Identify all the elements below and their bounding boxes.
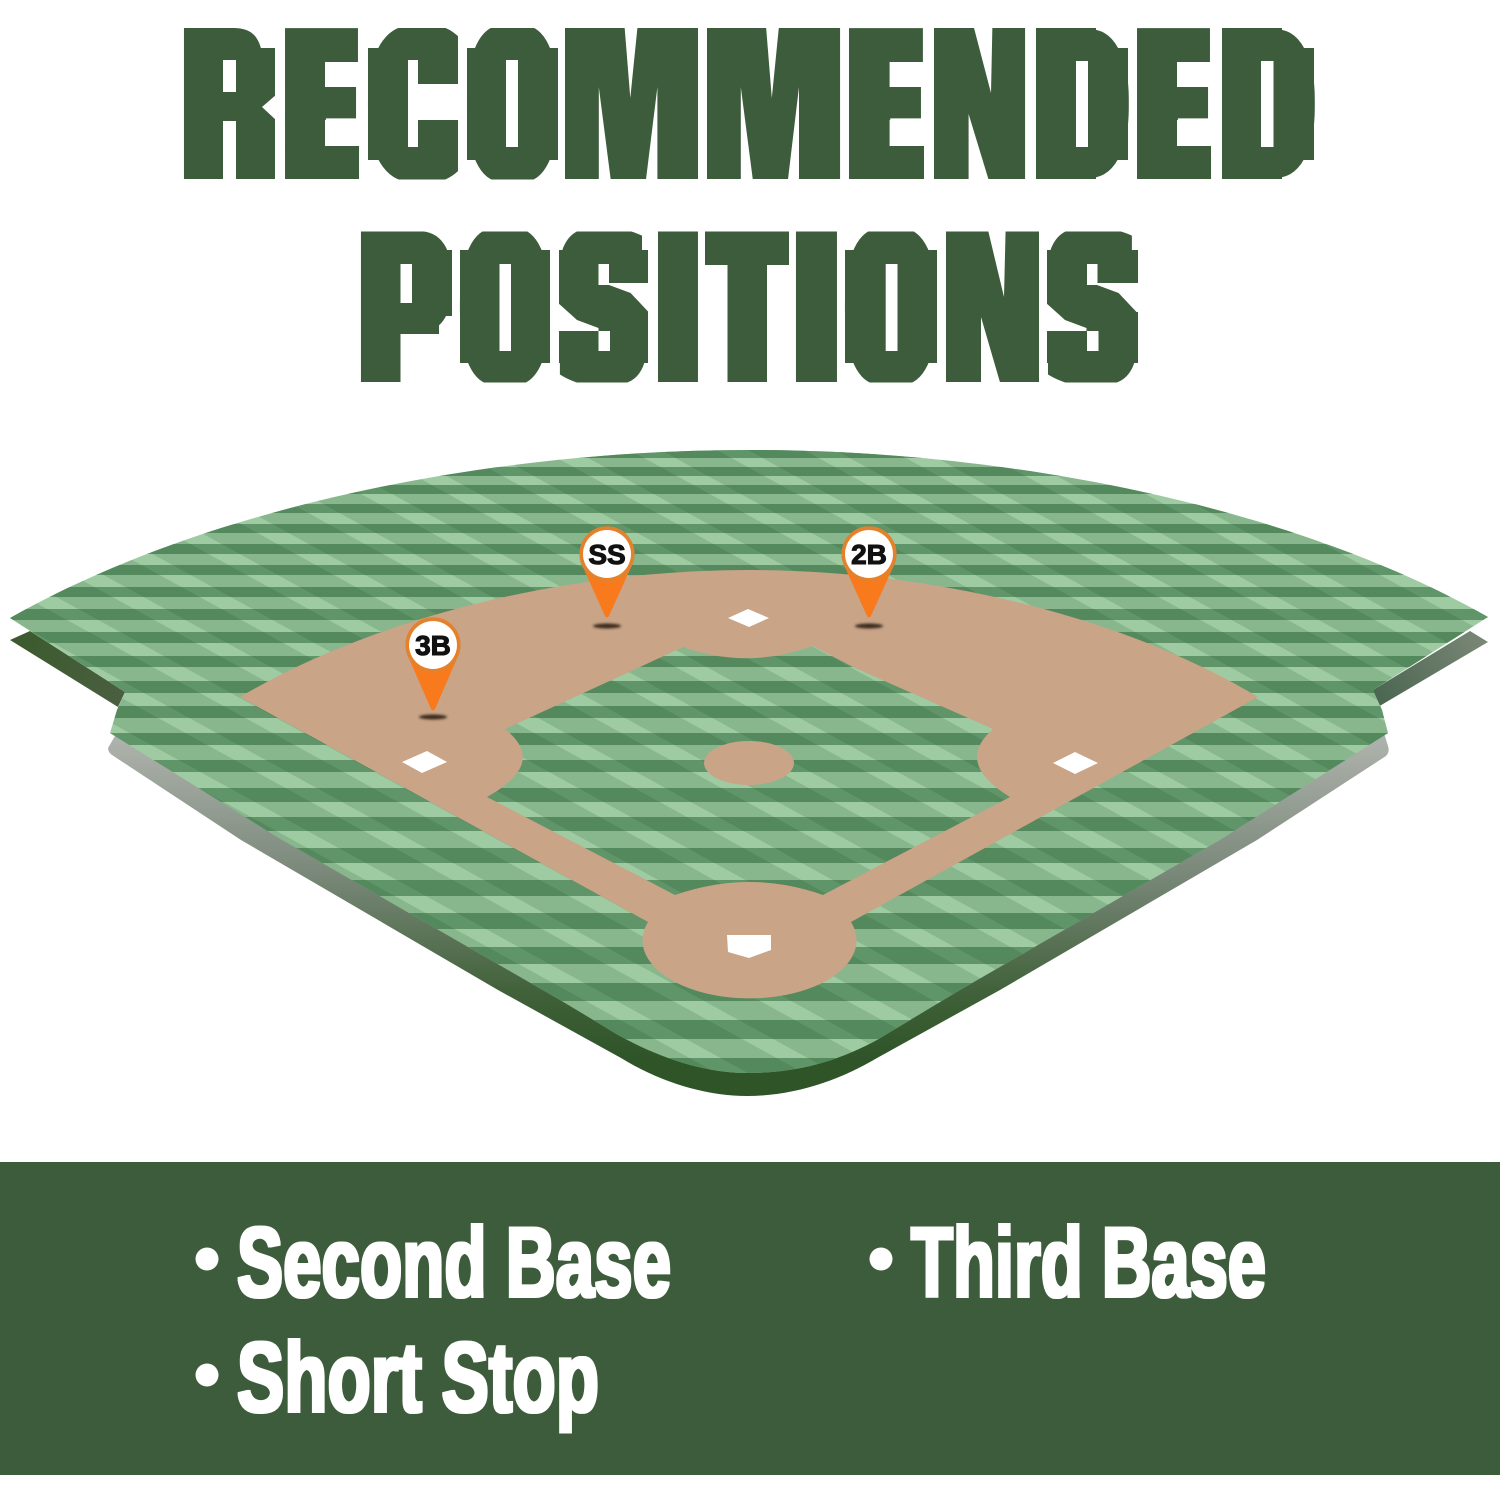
- list item: short stop: [196, 1322, 599, 1432]
- title: positions: S: [1050, 197, 1135, 425]
- title: recommended: M: [564, 0, 700, 222]
- title: positions: I: [798, 197, 835, 425]
- title: recommended: D: [1224, 0, 1309, 222]
- pin: short stop: [580, 526, 634, 628]
- second base: [728, 609, 769, 627]
- pitcher's mound: [704, 741, 794, 785]
- banner: position list: [0, 1162, 1500, 1475]
- pin: third base: 3B: [415, 630, 451, 661]
- title: recommended: N: [935, 0, 1024, 222]
- baseball field diagram: [0, 440, 1500, 1096]
- first base: [1053, 752, 1098, 774]
- list item: second base: [196, 1206, 671, 1318]
- field thickness: lower edge: [108, 733, 1389, 1096]
- field thickness: right wing edge: [1373, 631, 1488, 707]
- title: recommended: E: [287, 0, 355, 222]
- title block-letter detailing: [100, 0, 1400, 412]
- banner background: [0, 1162, 1500, 1475]
- title: recommended: E: [1139, 0, 1207, 222]
- title: positions: S: [562, 197, 645, 425]
- title: positions: O: [466, 197, 543, 425]
- pin: second base: 2B: [851, 539, 887, 570]
- list item: third base: [870, 1206, 1266, 1318]
- title: positions: P: [361, 197, 446, 425]
- list item: short stop: Short Stop: [237, 1322, 599, 1432]
- pin: third base: [406, 617, 460, 720]
- third base: [402, 751, 447, 773]
- list item: second base: Second Base: [237, 1206, 671, 1318]
- title: positions: T: [716, 197, 778, 425]
- title: recommended: O: [473, 0, 552, 222]
- infield dirt with grass diamond cutout: [240, 570, 1258, 998]
- title: positions: O: [851, 197, 931, 425]
- list item: third base: Third Base: [911, 1206, 1266, 1318]
- title: positions: N: [947, 197, 1038, 425]
- title: positions: I: [660, 197, 696, 425]
- title: recommended: M: [706, 0, 842, 222]
- grass surface with mown stripes: [0, 440, 1500, 1090]
- title: recommended: D: [1038, 0, 1123, 222]
- home plate: [727, 935, 771, 958]
- title: recommended: E: [851, 0, 920, 222]
- pin: second base: [842, 526, 896, 628]
- title: recommended: C: [374, 0, 454, 222]
- field thickness: left wing edge: [10, 631, 125, 707]
- pin: short stop: SS: [588, 539, 626, 570]
- title: recommended: R: [186, 0, 263, 222]
